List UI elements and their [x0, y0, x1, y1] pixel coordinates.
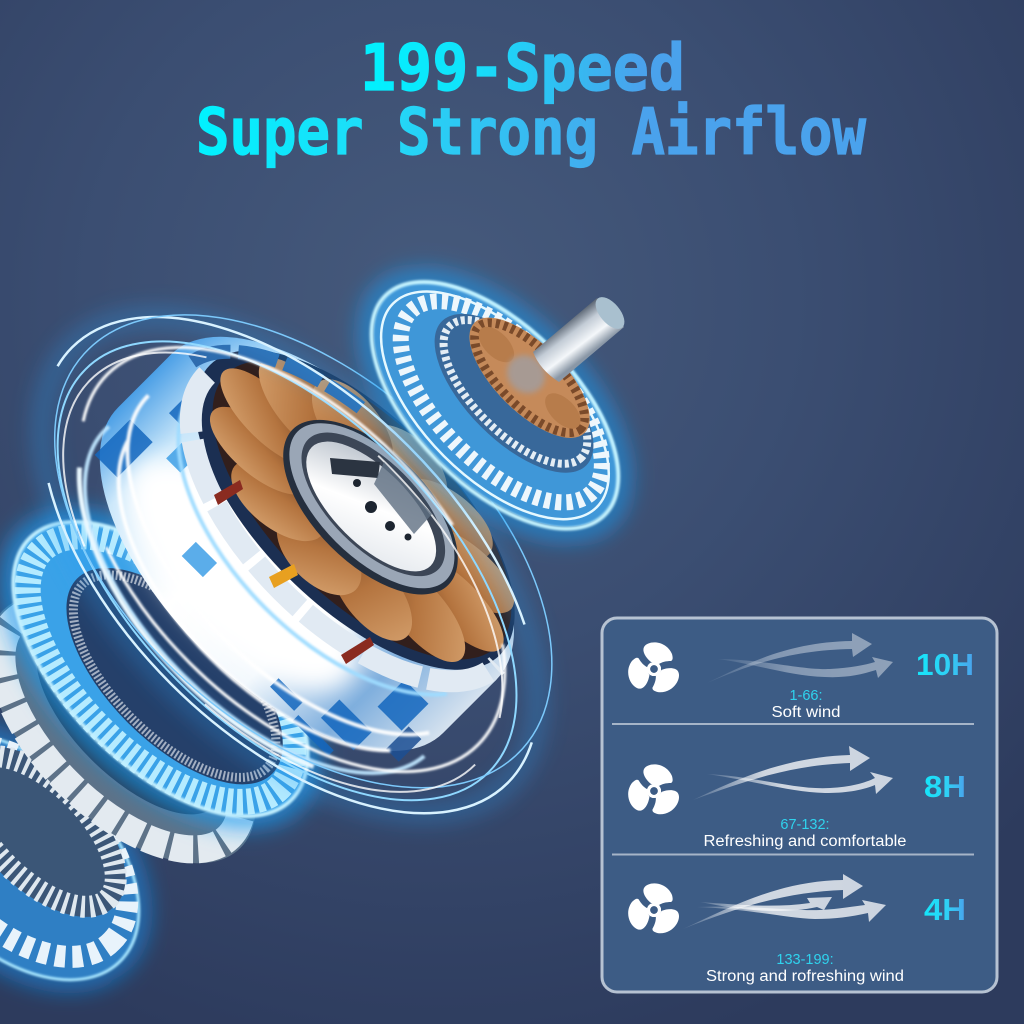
row 2: refreshing	[622, 746, 966, 850]
runtime 4H: 4H	[924, 892, 966, 927]
silver segmented band	[0, 595, 256, 863]
speed label 2	[704, 817, 906, 850]
airflow arrows 3	[683, 874, 886, 929]
speed label 3	[706, 952, 904, 985]
fan icon 1	[622, 642, 682, 698]
speed label 3: Strong and rofreshing wind	[706, 968, 904, 985]
title	[196, 32, 866, 170]
upper copper hub	[450, 299, 609, 457]
drum blue facets	[61, 369, 486, 794]
copper stator face	[160, 308, 564, 712]
title: Super Strong Airflow	[196, 96, 866, 170]
motor illustration	[0, 107, 748, 980]
drum body	[39, 273, 578, 812]
speed label 1: 1-66:	[789, 688, 823, 704]
middle glowing ring	[0, 470, 360, 869]
silver rim segments	[136, 375, 497, 736]
motor shaft	[533, 292, 630, 382]
speed label 3: 133-199:	[776, 952, 834, 968]
runtime 8H: 8H	[924, 769, 966, 804]
drum swirl highlights	[22, 377, 481, 836]
speed label 2: 67-132:	[780, 817, 830, 833]
runtime 10H: 10H	[916, 647, 974, 682]
fan icon 3	[622, 883, 682, 939]
airflow arrows 1	[707, 633, 893, 683]
row 1: soft wind	[622, 633, 974, 721]
title: 199-Speed	[360, 32, 685, 106]
speed label 2: Refreshing and comfortable	[704, 833, 906, 850]
speed label 1: Soft wind	[772, 704, 840, 721]
airflow arrows 2	[693, 746, 893, 800]
main airflow swirl rings	[0, 199, 656, 904]
speed panel	[602, 618, 997, 992]
inner bearing and holes	[330, 458, 432, 540]
row 3: strong	[622, 874, 966, 985]
speed label 1	[772, 688, 840, 721]
stator color accents	[214, 480, 374, 664]
center bowl	[253, 390, 488, 625]
lower rotor glow ring	[0, 733, 139, 980]
fan icon 2	[622, 764, 682, 820]
upper rotor disc	[325, 236, 665, 575]
